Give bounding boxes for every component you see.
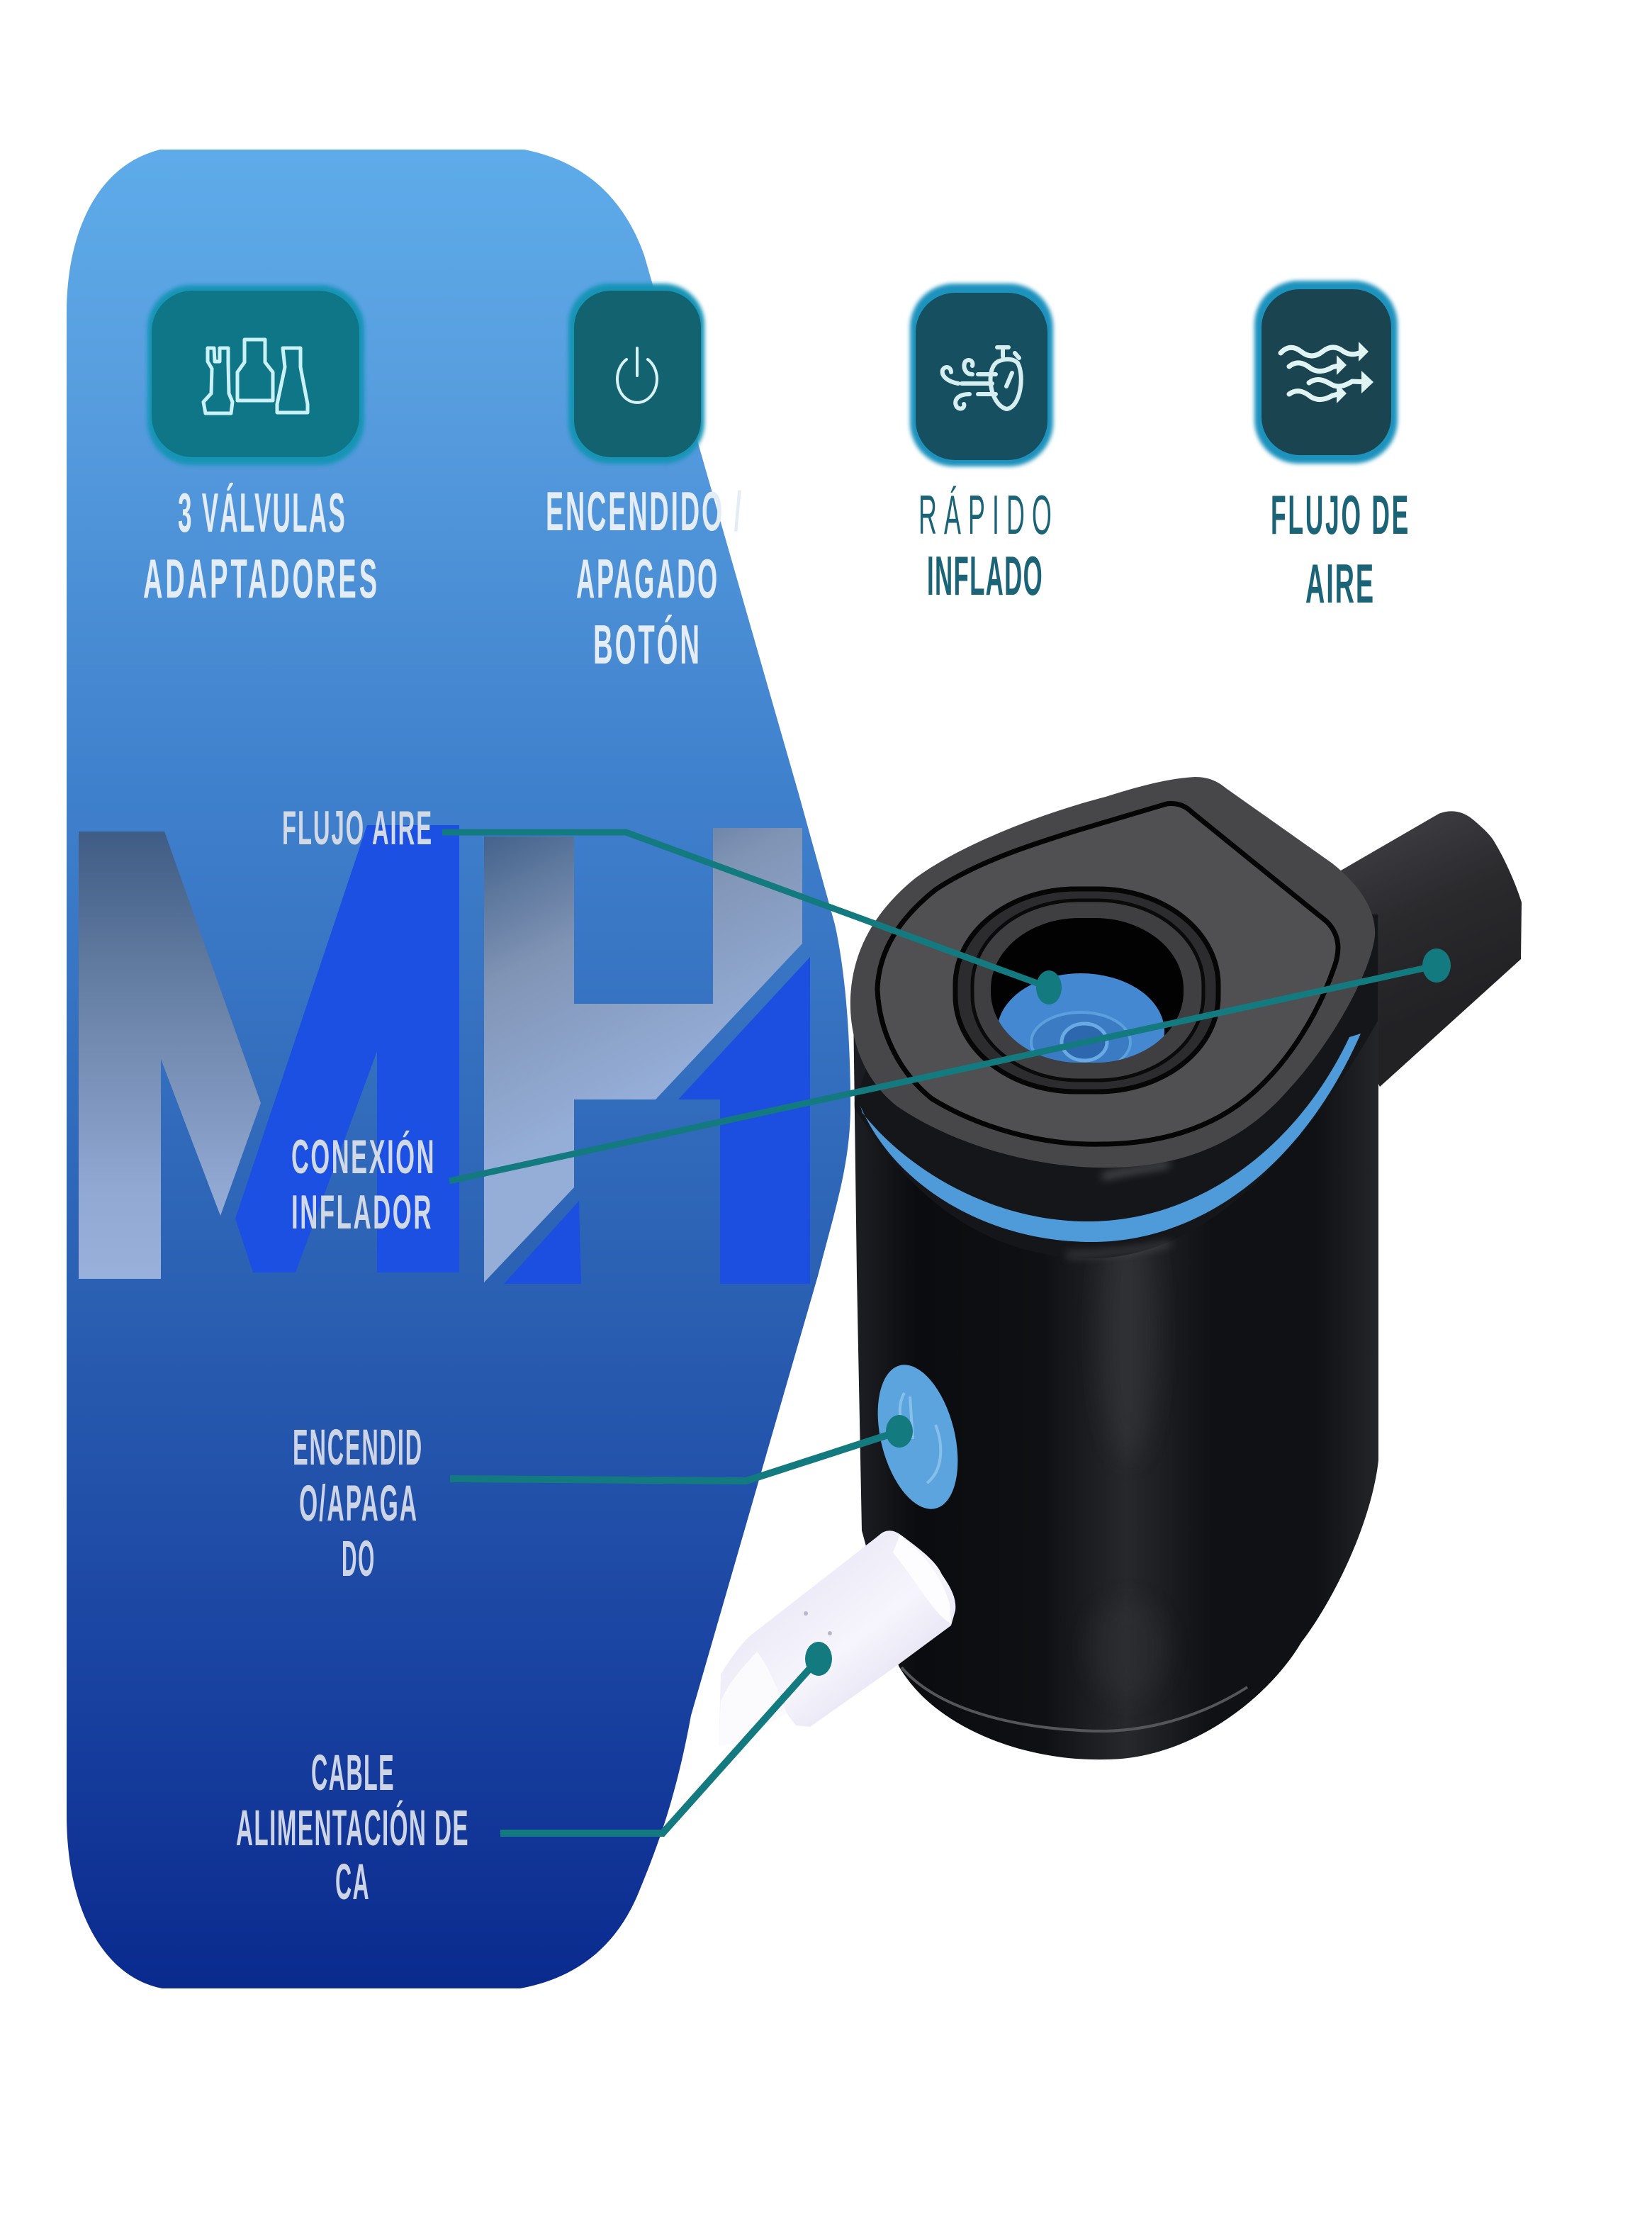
callout: cable alimentación de CA <box>236 1642 832 1910</box>
pump nozzle <box>1332 811 1522 1087</box>
callout: conexión inflador: INFLADOR <box>291 1185 433 1239</box>
body shading <box>853 914 1378 1698</box>
label: encendido / apagado botón: BOTÓN <box>593 613 702 676</box>
label: encendido / apagado botón: APAGADO <box>576 547 719 610</box>
pump body <box>853 914 1378 1759</box>
watermark logo: MH <box>79 825 810 1284</box>
callout: encendido/apagado: DO <box>342 1531 376 1587</box>
label: 3 válvulas adaptadores: 3 VÁLVULAS <box>178 481 347 544</box>
product: air pump <box>719 777 1522 1759</box>
usb cable connector <box>719 1530 955 1746</box>
text: RÁPIDO <box>918 483 1059 546</box>
label: flujo de aire <box>1271 483 1410 615</box>
power button <box>864 1357 972 1517</box>
callout: flujo aire <box>282 801 1062 1004</box>
shoulder gloss <box>1067 1164 1171 1255</box>
feature: on/off button <box>546 284 743 676</box>
text: FLUJO DE <box>1271 483 1410 546</box>
label: 3 válvulas adaptadores <box>143 481 380 610</box>
blue band <box>860 1034 1361 1242</box>
text: ADAPTADORES <box>143 547 380 610</box>
label: rápido inflado: INFLADO <box>927 544 1043 607</box>
text: ENCENDIDO / <box>546 480 743 542</box>
callout: cable alimentación de CA: CABLE <box>311 1745 395 1801</box>
callout: encendido/apagado: ENCENDID <box>293 1420 423 1476</box>
label: rápido inflado <box>918 483 1059 607</box>
icon: wavy arrows <box>1254 281 1398 464</box>
feature: 3 valve adapters <box>143 285 380 610</box>
callout: conexión inflador: CONEXIÓN <box>291 1130 436 1184</box>
callout: encendido/apagado <box>293 1415 913 1587</box>
pump top cap <box>850 777 1375 1168</box>
air hole <box>955 889 1218 1092</box>
icon: power <box>568 284 704 464</box>
label: encendido / apagado botón <box>546 480 743 676</box>
label: flujo de aire: AIRE <box>1305 552 1375 615</box>
base bevel highlight <box>901 1667 1247 1731</box>
callout: encendido/apagado: O/APAGA <box>299 1476 418 1532</box>
callout: conexión inflador <box>291 948 1451 1239</box>
callout: cable alimentación de CA: ALIMENTACIÓN DE <box>236 1801 469 1857</box>
icon: adapters <box>147 285 364 465</box>
feature: air flow <box>1254 281 1410 615</box>
feature: fast inflation <box>910 284 1059 607</box>
callout: flujo aire: FLUJO AIRE <box>282 801 433 855</box>
cap groove <box>877 804 1338 1144</box>
blue impeller <box>999 973 1164 1063</box>
icon: stopwatch and wind <box>910 284 1053 466</box>
callout: cable alimentación de CA: CA <box>335 1854 370 1910</box>
panel: blue gradient background <box>67 150 850 1988</box>
